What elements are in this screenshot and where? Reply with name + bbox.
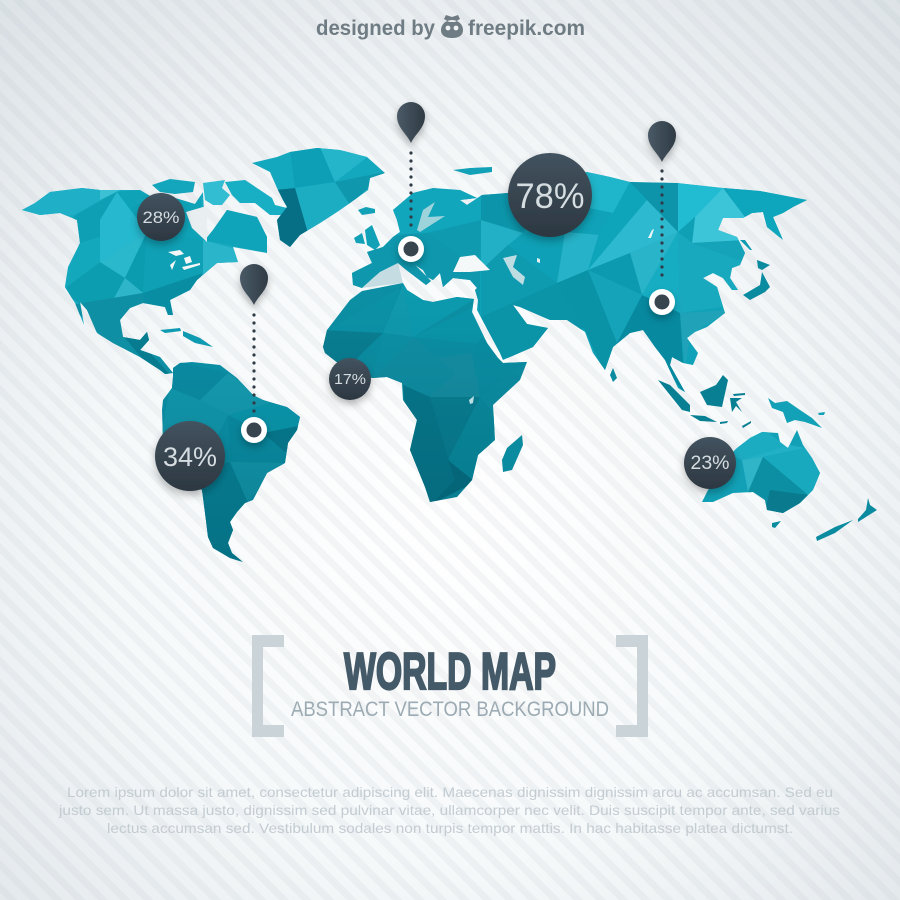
timor chain: [720, 421, 728, 424]
new zealand south: [816, 520, 853, 541]
pacific and atlantic islands: [354, 167, 877, 541]
lorem ipsum paragraph: justo sem. Ut massa justo, dignissim sed pulvinar vitae, ullamcorper nec velit. Duis suscipit tempor ante, sed varius: [58, 802, 840, 818]
stat: 17%: [329, 358, 371, 400]
pin: asia: [648, 121, 676, 162]
dotted line: asia: [660, 171, 664, 282]
header: designed by freepik: designed by: [316, 17, 435, 40]
lorem ipsum paragraph: [58, 784, 840, 836]
japan: [743, 272, 770, 300]
sulawesi: [730, 398, 742, 412]
svalbard: [453, 167, 492, 175]
lorem ipsum paragraph: Lorem ipsum dolor sit amet, consectetur adipiscing elit. Maecenas dignissim dignissim arcu ac accumsan. Sed eu: [67, 784, 833, 800]
sri lanka: [610, 368, 617, 382]
pin: europe: [397, 102, 425, 143]
ireland: [354, 233, 365, 244]
great britain: [365, 225, 380, 250]
stat: 34%: 34%: [163, 442, 217, 472]
ring marker: europe: [398, 236, 424, 262]
great lakes: [168, 250, 200, 270]
south america: [162, 362, 300, 562]
left bracket: [252, 635, 284, 737]
north america: [22, 188, 267, 374]
java: [690, 415, 717, 422]
greenland: [252, 148, 385, 247]
new zealand north: [858, 498, 877, 522]
stat: 28%: [137, 193, 185, 241]
subtitle: ABSTRACT VECTOR BACKGROUND: [291, 698, 609, 721]
eurasia: [352, 172, 807, 392]
borneo: [700, 375, 728, 407]
sumatra: [658, 380, 690, 412]
stat: 28%: 28%: [142, 208, 180, 227]
tasmania: [772, 521, 781, 528]
africa: [320, 280, 530, 505]
ring marker: asia: [649, 289, 675, 315]
ring marker: south america: [241, 417, 267, 443]
stat: 78%: 78%: [516, 177, 584, 216]
madagascar: [502, 435, 523, 472]
new guinea: [768, 398, 822, 428]
hudson bay: [186, 207, 207, 242]
dotted line: europe: [409, 153, 413, 230]
seas: [362, 202, 654, 288]
stat: 23%: [684, 437, 736, 489]
arctic islands: [135, 179, 287, 215]
african lakes: [469, 396, 474, 404]
australia: [702, 430, 820, 513]
right bracket: [616, 635, 648, 737]
world map: [15, 145, 877, 568]
stat: 78%: [508, 153, 592, 237]
header: designed by freepik: [316, 15, 585, 40]
dotted line: south america: [252, 315, 256, 412]
caribbean islands: [160, 328, 213, 347]
title: WORLD MAP: [344, 643, 556, 701]
stat: 23%: 23%: [690, 453, 730, 474]
stat: 17%: 17%: [334, 371, 366, 388]
iceland: [358, 207, 375, 215]
stat: 34%: [155, 421, 225, 491]
sakhalin: [740, 240, 752, 250]
pin: south america: [240, 264, 268, 305]
lorem ipsum paragraph: lectus accumsan sed. Vestibulum sodales non turpis tempor mattis. In hac habitasse platea dictumst.: [107, 820, 793, 836]
header: designed by freepik: freepik.com: [468, 17, 585, 40]
